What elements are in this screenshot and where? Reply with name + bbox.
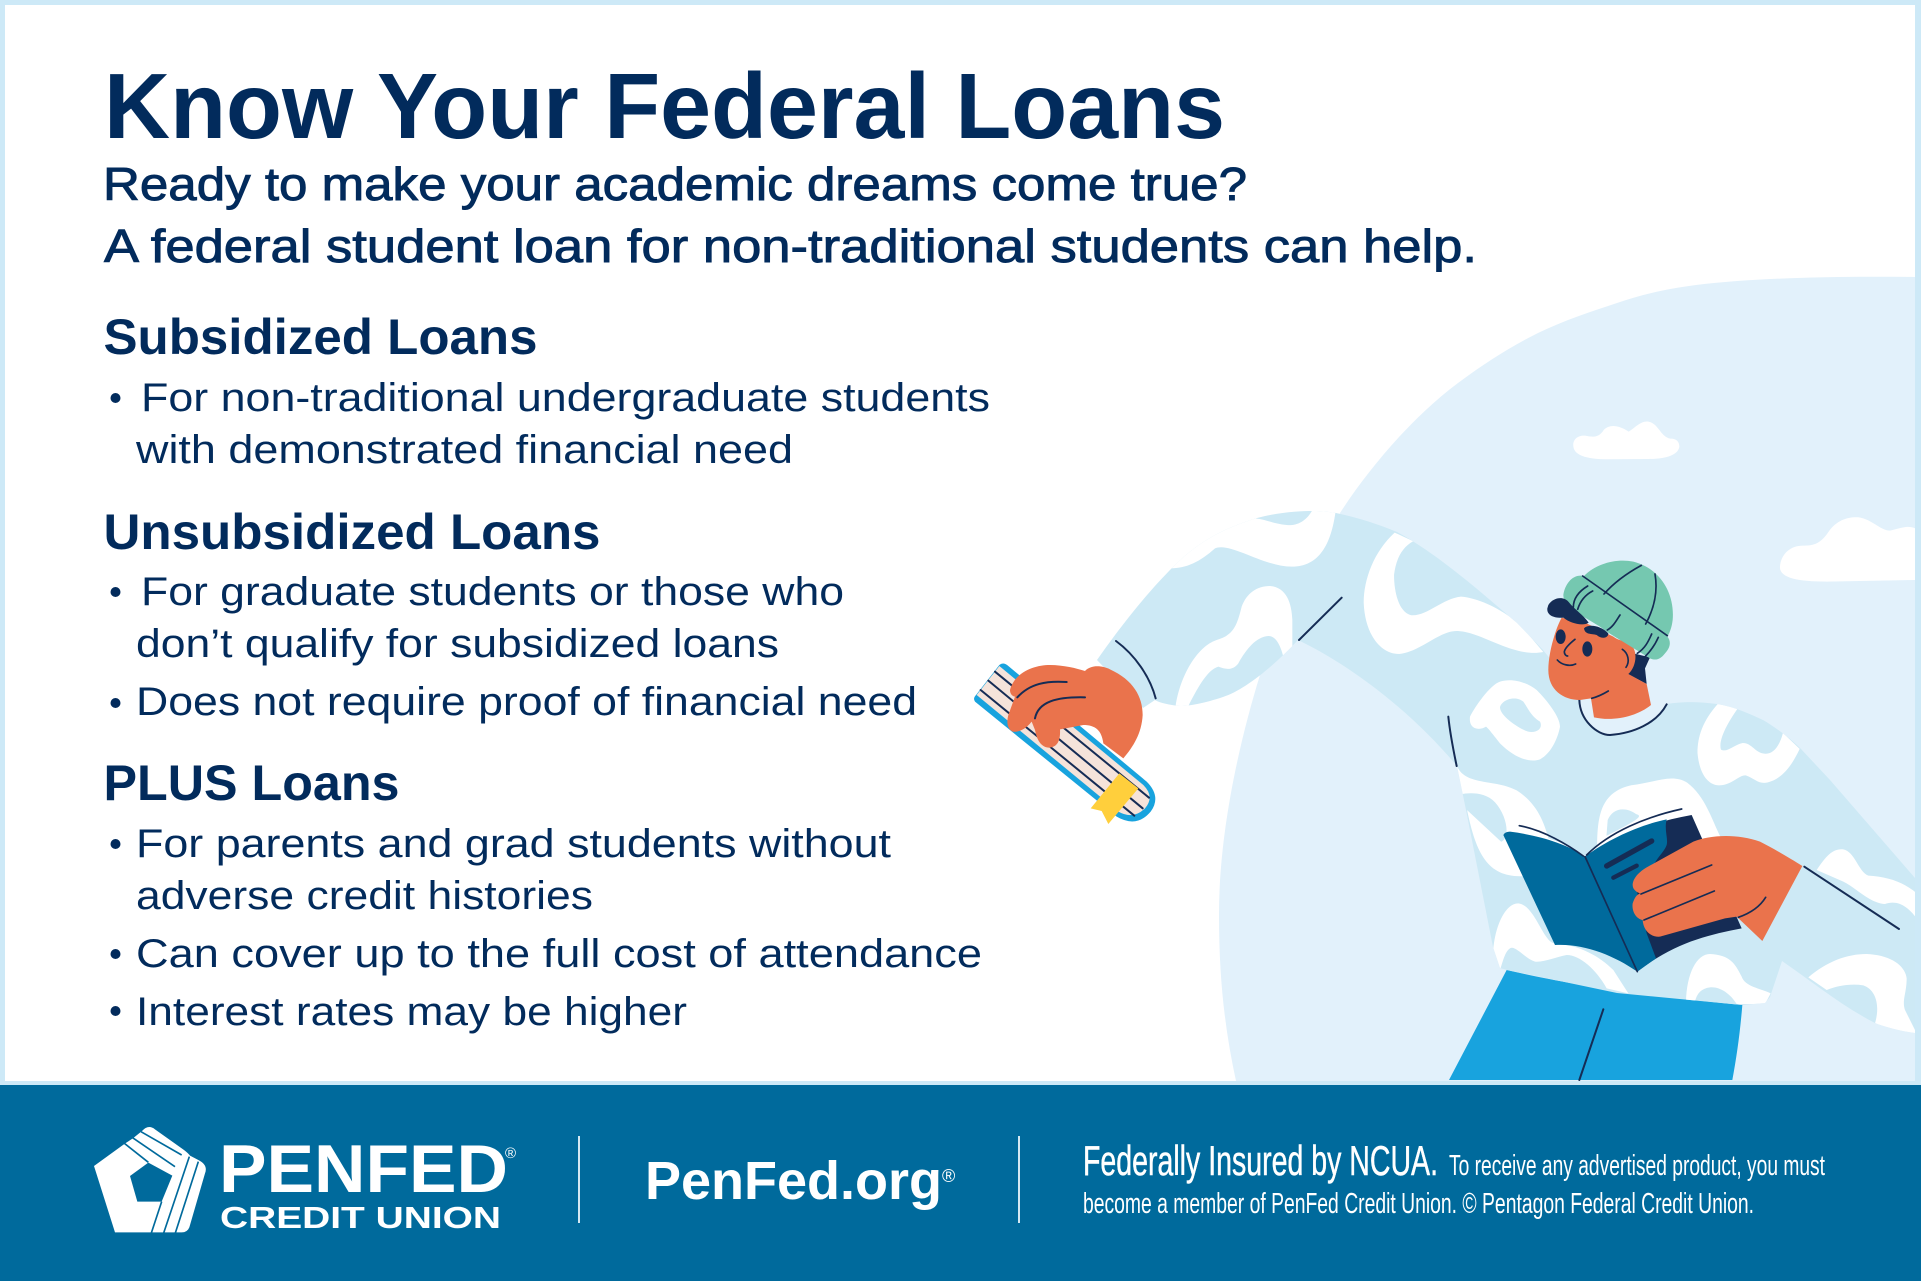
sweater cloud pattern <box>1170 508 1917 1033</box>
eyes <box>1556 629 1592 657</box>
hair and brow <box>1547 598 1608 638</box>
bullet text: For parents and grad students without <box>136 822 891 866</box>
jeans <box>1449 970 1742 1080</box>
bullet <box>110 393 120 403</box>
heading: Subsidized Loans <box>104 309 538 365</box>
logo wordmark <box>219 1131 516 1235</box>
subtitle <box>103 158 1477 272</box>
bullet text: For non-traditional undergraduate students <box>141 376 990 420</box>
sweater <box>1097 511 1915 1033</box>
divider <box>578 1136 580 1223</box>
icon: open book held in hand <box>1503 809 1802 972</box>
page edges <box>1508 810 1682 860</box>
website: ® <box>942 1166 955 1186</box>
subtitle: Ready to make your academic dreams come true? <box>103 158 1247 210</box>
collar <box>1579 698 1667 735</box>
yellow bookmark <box>1091 773 1138 824</box>
left hand <box>1007 665 1143 758</box>
face lines <box>1557 639 1628 698</box>
large cloud <box>1780 517 1915 582</box>
bullet text: Interest rates may be higher <box>136 990 687 1034</box>
right hand <box>1632 836 1802 941</box>
heading: PLUS Loans <box>104 755 400 811</box>
background sky shape <box>1219 277 1915 1081</box>
bullet text: Can cover up to the full cost of attendance <box>136 932 982 976</box>
beanie <box>1563 561 1673 660</box>
illustration: student reading <box>974 277 1917 1081</box>
bullet text <box>136 570 917 724</box>
icon: PenFed pentagon logo <box>94 1127 206 1234</box>
disclosure text: Federally Insured by NCUA. <box>1083 1137 1438 1184</box>
bullets <box>110 587 120 708</box>
character head with beanie <box>1547 561 1673 735</box>
bullet text <box>136 822 982 1034</box>
face and neck <box>1548 618 1651 719</box>
back hair <box>1627 653 1650 684</box>
bullet text: adverse credit histories <box>136 874 593 918</box>
icon: closed book with bookmark <box>974 664 1155 824</box>
bullet text: For graduate students or those who <box>141 570 844 614</box>
bullet text <box>135 376 990 472</box>
bullets <box>110 839 120 1016</box>
footer band <box>0 1085 1921 1281</box>
website: PenFed.org <box>645 1151 942 1211</box>
heading: Unsubsidized Loans <box>104 504 600 560</box>
logo wordmark: ® <box>505 1145 516 1162</box>
logo wordmark: PENFED <box>219 1131 508 1207</box>
title: Know Your Federal Loans <box>104 54 1225 158</box>
subtitle: A federal student loan for non-traditional students can help. <box>104 220 1477 272</box>
sweater fold lines <box>1116 598 1899 929</box>
disclosure text <box>1083 1137 1825 1220</box>
bullet text: Does not require proof of financial need <box>136 680 917 724</box>
logo wordmark: CREDIT UNION <box>220 1200 501 1235</box>
section: unsubsidized loans <box>104 504 917 724</box>
bullet text: don’t qualify for subsidized loans <box>136 622 779 666</box>
section: PLUS loans <box>104 755 982 1034</box>
divider <box>1018 1136 1020 1223</box>
section: subsidized loans <box>104 309 990 472</box>
bullet text: with demonstrated financial need <box>135 428 793 472</box>
small cloud <box>1573 422 1679 459</box>
